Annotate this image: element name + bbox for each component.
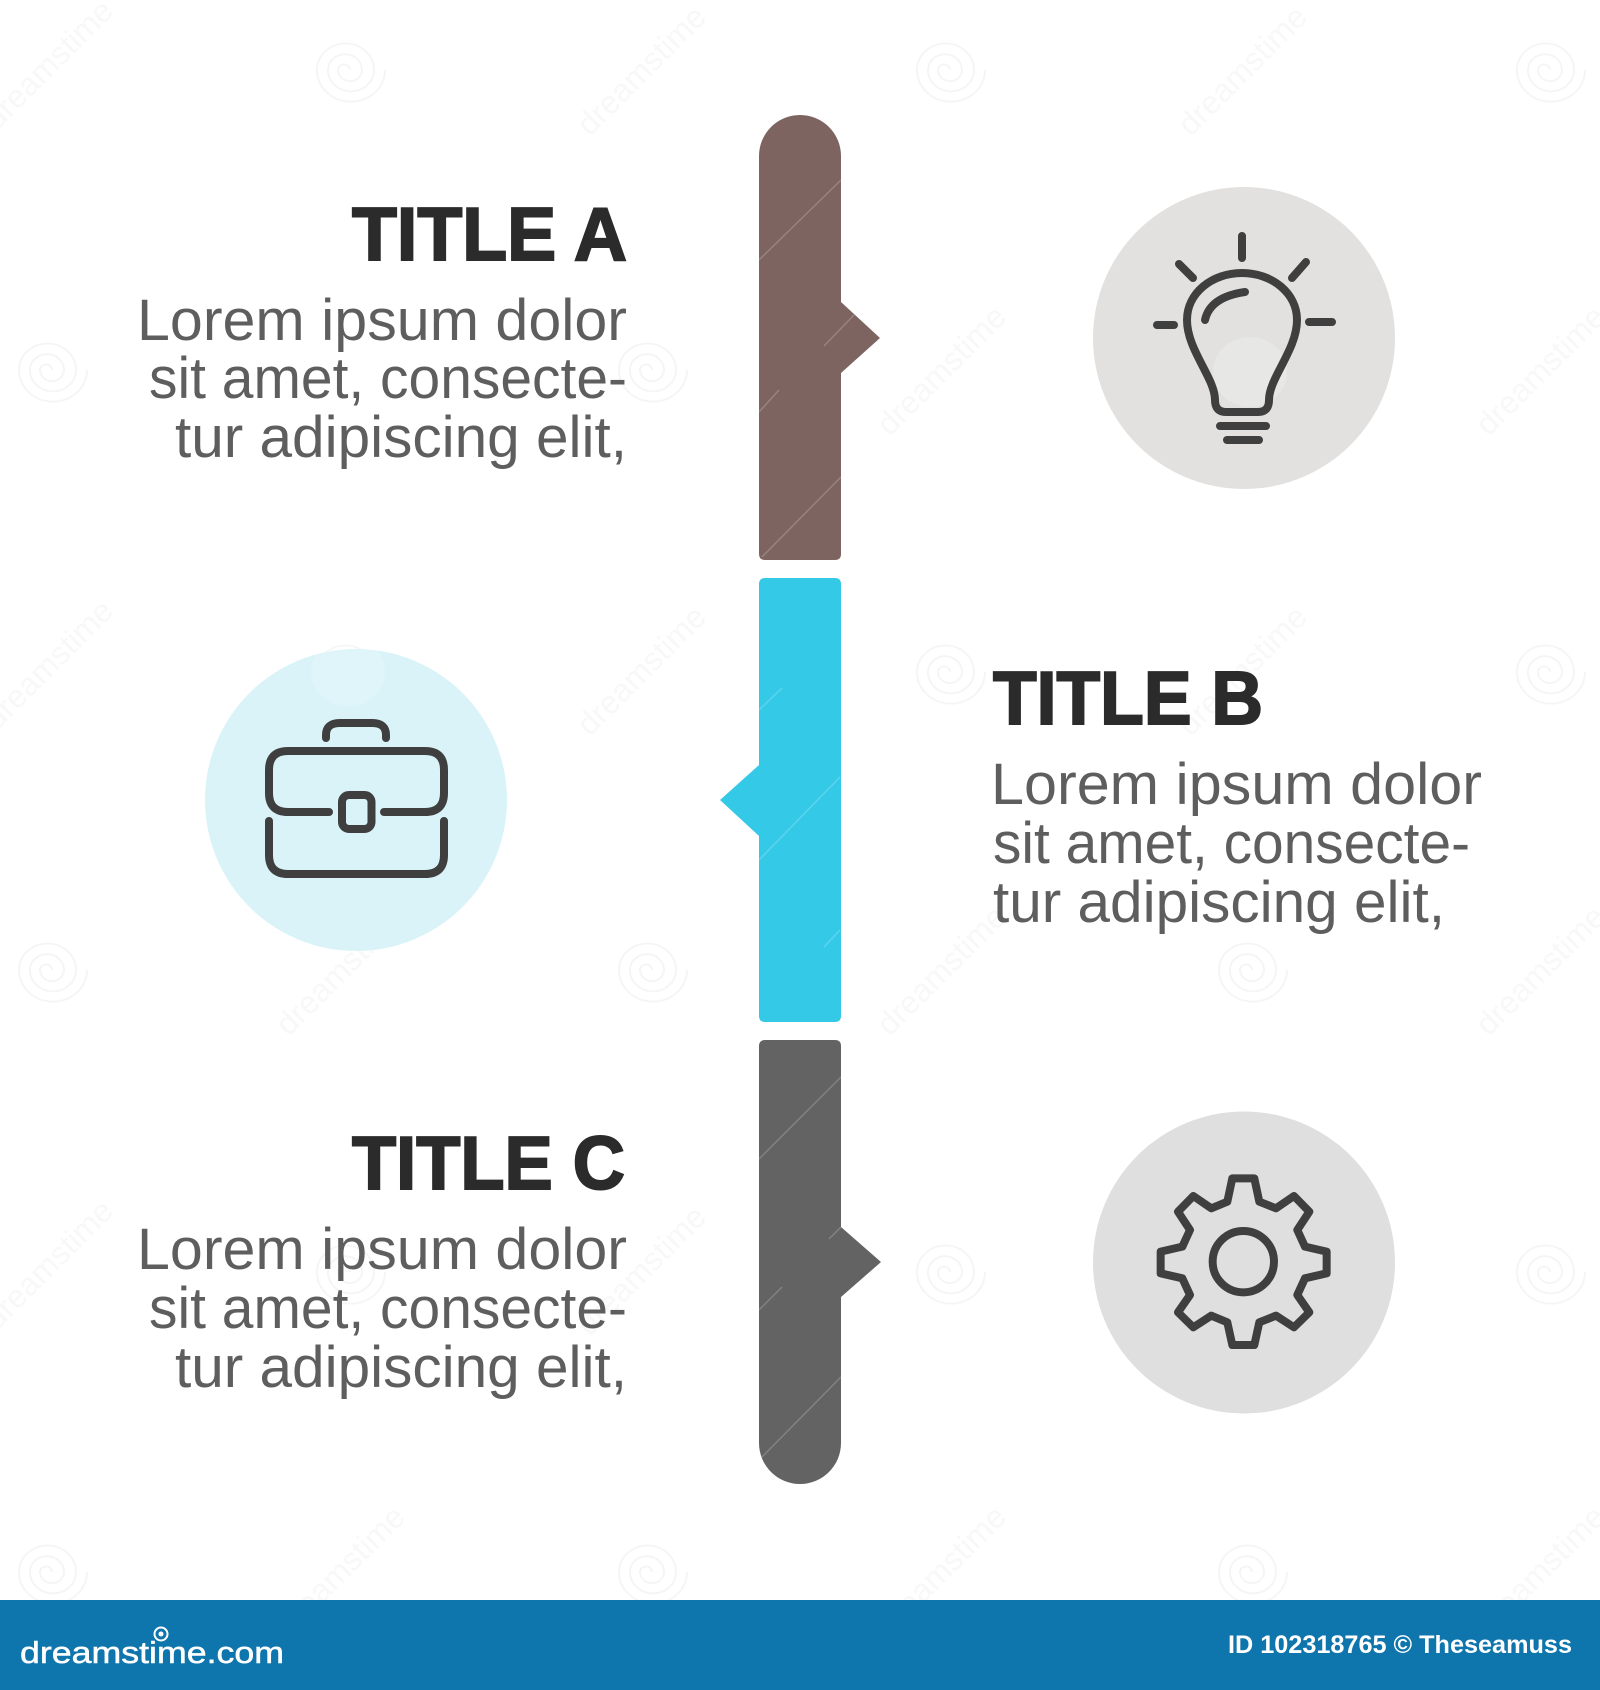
watermark text: dreamstime [569, 0, 713, 142]
body text C: tur adipiscing elit, [175, 1335, 627, 1400]
timeline bar segment A (brown, pointing right) [759, 115, 880, 560]
icon: briefcase in light blue circle [205, 637, 507, 951]
watermark text: dreamstime [1170, 598, 1314, 742]
body text C: sit amet, consecte- [149, 1276, 627, 1341]
watermark text: dreamstime [1170, 0, 1314, 142]
watermark text: dreamstime [268, 898, 412, 1042]
watermark text: dreamstime [869, 1498, 1013, 1642]
body text A: tur adipiscing elit, [175, 405, 627, 470]
body text B: tur adipiscing elit, [993, 870, 1445, 935]
text block: title B [991, 656, 1482, 935]
watermark text: dreamstime [569, 598, 713, 742]
body text B: sit amet, consecte- [993, 811, 1470, 876]
watermark text: dreamstime [869, 898, 1013, 1042]
watermark lines across bars [759, 180, 854, 1457]
footer image id and credit: ID 102318765 © Theseamuss [1228, 1631, 1572, 1659]
timeline bar segment B (cyan, pointing left) [720, 578, 841, 1022]
body text A [137, 288, 627, 470]
body text A: sit amet, consecte- [149, 346, 627, 411]
icon: light bulb in grey circle [1093, 187, 1395, 489]
timeline bar segment C (grey, pointing right) [759, 1040, 881, 1484]
body text C: Lorem ipsum dolor [137, 1217, 627, 1282]
text block: title A [137, 192, 627, 470]
body text C [137, 1217, 627, 1400]
footer logo: dreamstime.com [20, 1635, 284, 1670]
icon: gear in grey circle [1093, 1112, 1395, 1414]
watermark text: dreamstime [569, 1198, 713, 1342]
heading: title A: TITLE A [352, 192, 627, 276]
body text B [991, 752, 1482, 935]
heading: title C: TITLE C [352, 1121, 625, 1205]
body text B: Lorem ipsum dolor [991, 752, 1482, 817]
heading: title B: TITLE B [993, 656, 1263, 740]
text block: title C [137, 1121, 627, 1400]
footer band [0, 1600, 1600, 1690]
watermark text: dreamstime [869, 298, 1013, 442]
watermark text: dreamstime [268, 1498, 412, 1642]
body text A: Lorem ipsum dolor [137, 288, 627, 353]
